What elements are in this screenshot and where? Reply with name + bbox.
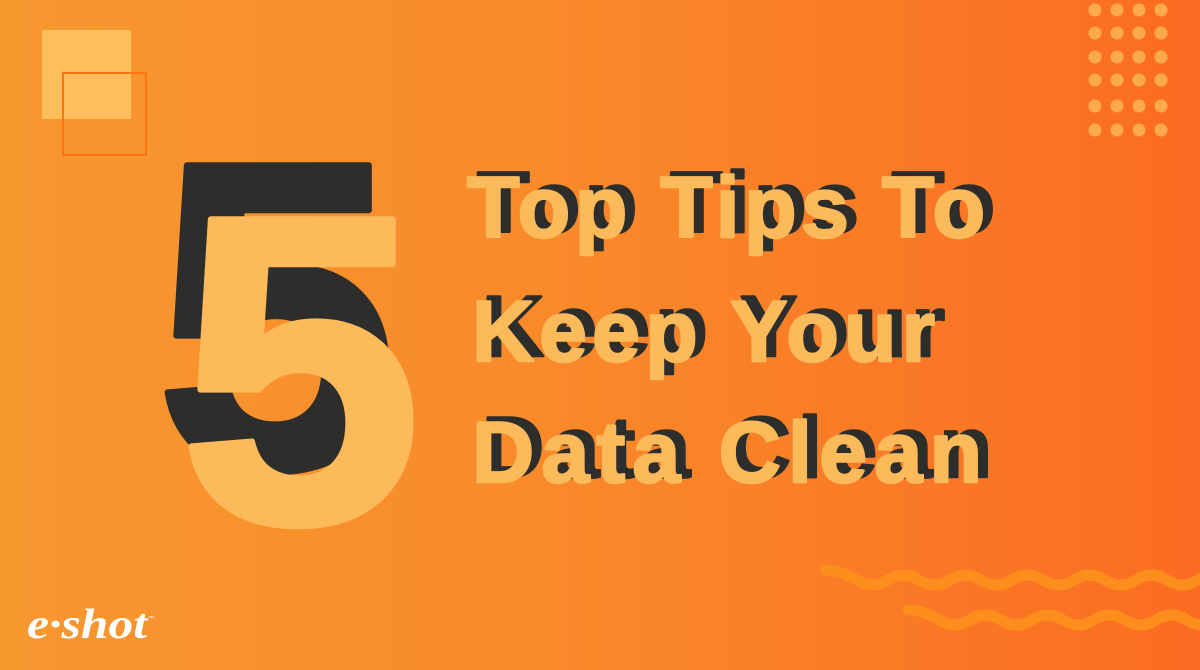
title: Keep Your bbox=[482, 279, 945, 375]
logo: e-shot: ™ bbox=[148, 615, 154, 622]
title bbox=[467, 155, 995, 501]
decorative squares bbox=[42, 30, 146, 155]
big number 5: 5 bbox=[178, 125, 423, 616]
title: Top Tips To bbox=[467, 160, 985, 256]
dot grid bbox=[1088, 4, 1168, 136]
waves bbox=[826, 570, 1200, 625]
big number 5: 5 bbox=[154, 71, 399, 562]
title: Top Tips To bbox=[477, 155, 995, 251]
title: Data Clean bbox=[472, 405, 982, 501]
title: Data Clean bbox=[482, 400, 992, 496]
logo: e-shot: e·shot bbox=[27, 602, 149, 648]
title: Keep Your bbox=[472, 284, 935, 380]
